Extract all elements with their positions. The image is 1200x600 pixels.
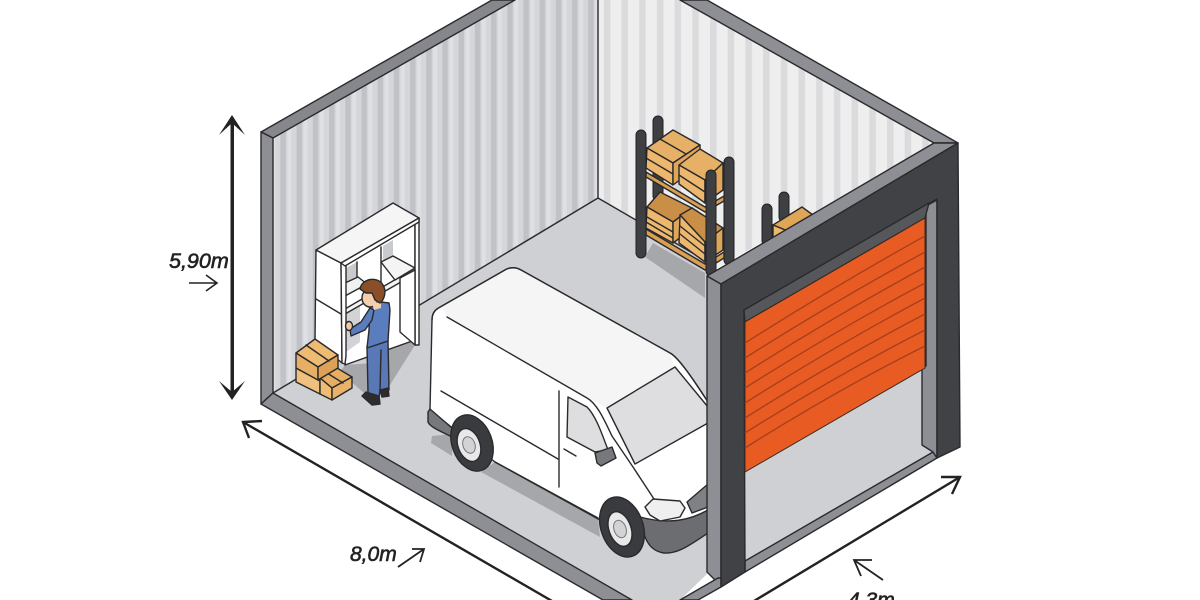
length dimension arrow	[243, 421, 552, 600]
head and hair	[360, 279, 385, 310]
left wall edge bands	[261, 0, 632, 600]
van body	[430, 268, 708, 535]
side window	[567, 397, 608, 452]
dark facade	[721, 143, 960, 587]
mirror	[595, 447, 616, 466]
box upper right	[679, 149, 723, 203]
shelf shadow	[340, 332, 415, 400]
floor	[273, 198, 708, 600]
rack with boxes	[636, 116, 734, 298]
front top band	[707, 143, 958, 284]
legs	[367, 340, 389, 397]
white van	[428, 268, 708, 563]
headlight	[645, 499, 685, 521]
box lower left	[646, 192, 692, 243]
right door frame	[922, 200, 937, 458]
left door post	[707, 276, 721, 586]
right wall top band	[680, 0, 958, 143]
length label: 8,0m	[350, 543, 397, 566]
floor boxes	[296, 339, 352, 400]
rear wheel	[443, 409, 501, 477]
width dimension arrow	[754, 477, 960, 600]
rear bumper	[428, 409, 452, 437]
white shelving unit	[315, 203, 419, 365]
height pointer arrow	[189, 275, 217, 291]
opening floor	[745, 368, 933, 561]
van shadow	[431, 434, 600, 537]
right back wall	[598, 0, 934, 274]
body creases	[447, 317, 654, 499]
box upper left	[646, 130, 700, 185]
front wall	[680, 143, 960, 600]
width pointer arrow	[854, 560, 883, 580]
shutter housing	[744, 203, 929, 322]
corner floor band	[680, 578, 721, 600]
torso and arm	[346, 302, 390, 348]
orange roller shutter	[745, 218, 925, 472]
front bumper	[640, 510, 708, 553]
height label: 5,90m	[169, 249, 229, 273]
person	[346, 279, 390, 405]
front wheel	[592, 491, 652, 563]
left back wall	[273, 0, 598, 393]
grille	[687, 484, 708, 513]
shoes	[362, 388, 389, 405]
windshield	[607, 367, 708, 464]
threshold	[745, 452, 937, 572]
box lower right	[679, 208, 723, 262]
length pointer arrow	[398, 549, 424, 567]
rear rack with box	[762, 192, 813, 246]
height dimension arrow	[219, 115, 245, 400]
